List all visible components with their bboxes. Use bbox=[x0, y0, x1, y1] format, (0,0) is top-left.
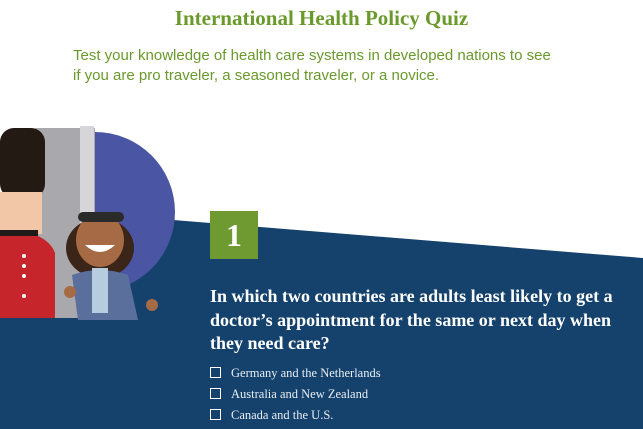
subtitle: if you are pro traveler, a seasoned traveler, or a novice. bbox=[73, 67, 439, 84]
title: International Health Policy Quiz bbox=[175, 6, 468, 30]
question: doctor’s appointment for the same or next day when bbox=[210, 310, 611, 330]
number box bbox=[210, 211, 258, 259]
options bbox=[210, 366, 381, 422]
question: they need care? bbox=[210, 333, 330, 353]
subtitle bbox=[73, 47, 551, 84]
option 1: Germany and the Netherlands bbox=[231, 366, 381, 380]
blue circle bbox=[95, 132, 175, 284]
option 2: Australia and New Zealand bbox=[231, 387, 368, 401]
option 3: Canada and the U.S. bbox=[231, 408, 333, 422]
dark blue band bbox=[0, 206, 643, 429]
subtitle: Test your knowledge of health care systems in developed nations to see bbox=[73, 47, 551, 64]
number box: 1 bbox=[226, 217, 242, 253]
background illustration bbox=[0, 126, 643, 429]
question bbox=[210, 286, 613, 353]
question: In which two countries are adults least likely to get a bbox=[210, 286, 613, 306]
guard bbox=[0, 128, 55, 318]
girl bbox=[64, 212, 158, 320]
grey pillar bbox=[35, 126, 95, 318]
